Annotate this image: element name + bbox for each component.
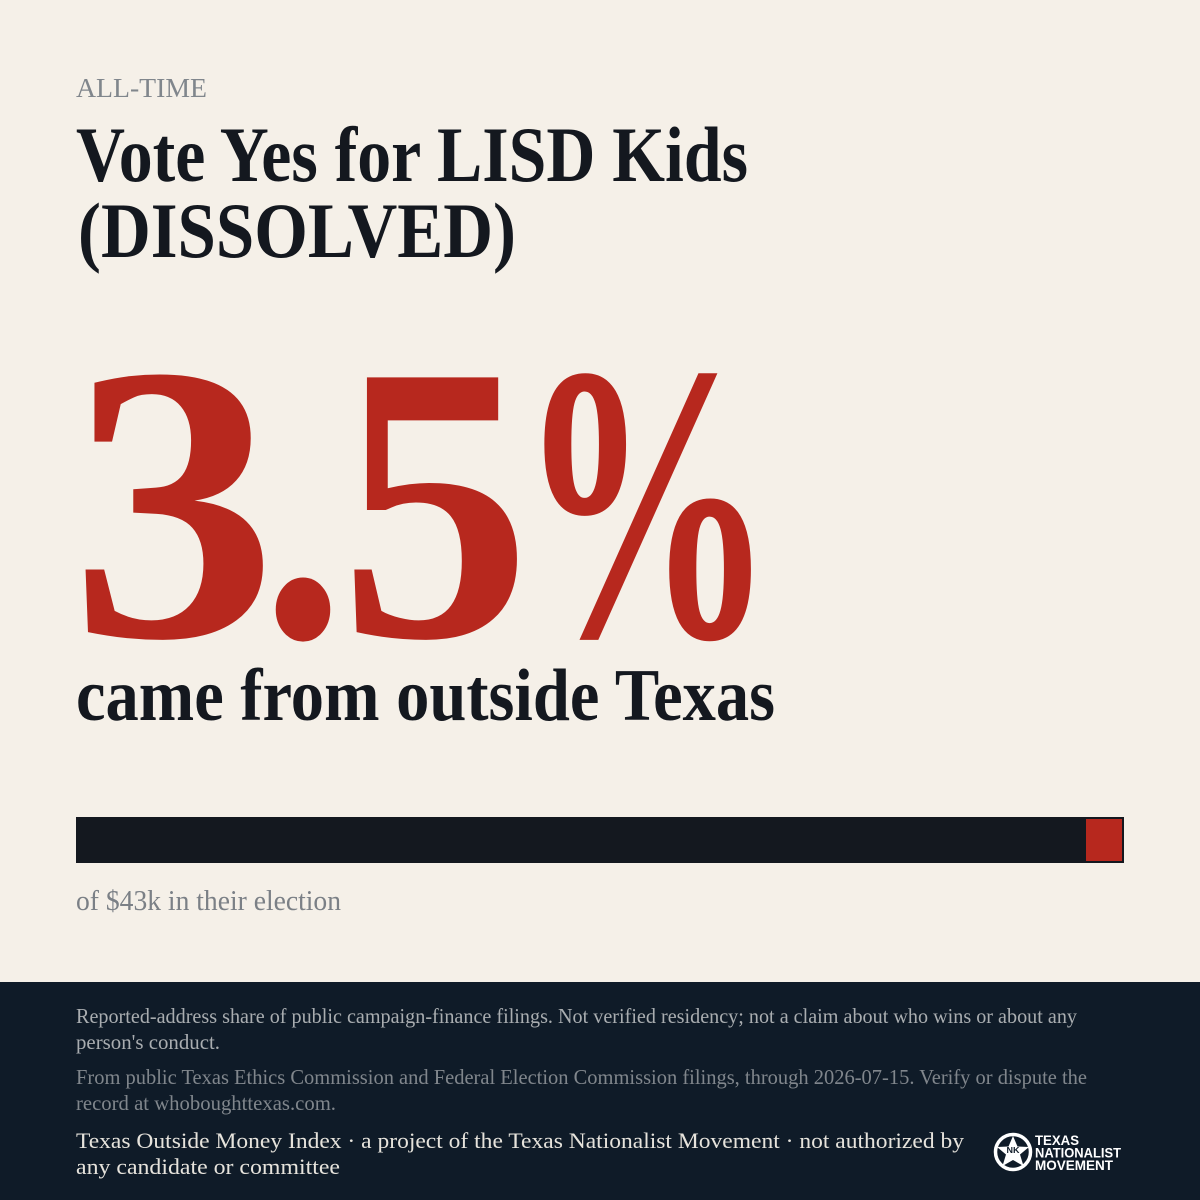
disclaimer text: Reported-address share of public campaign-finance filings. Not verified residency; not a claim about who wins or about any (76, 1004, 1077, 1028)
attribution text: Texas Outside Money Index · a project of the Texas Nationalist Movement · not authorized by (76, 1128, 965, 1153)
eyebrow: time range: ALL-TIME (76, 73, 207, 103)
statistic caption: came from outside Texas (76, 655, 775, 737)
big percentage statistic: % (518, 285, 775, 722)
disclaimer text: person's conduct. (76, 1030, 220, 1054)
source text (76, 1065, 1087, 1115)
bar track: in-state share (76, 817, 1124, 863)
title: (DISSOLVED) (78, 187, 516, 274)
source text: record at whoboughttexas.com. (76, 1091, 336, 1115)
bar caption: of $43k in their election (76, 886, 341, 917)
icon: star in ring: NK (1006, 1146, 1020, 1155)
big percentage statistic: . (261, 285, 345, 722)
big percentage statistic (70, 285, 775, 722)
share bar (76, 817, 1124, 863)
footer panel (0, 982, 1200, 1200)
attribution text (76, 1128, 965, 1179)
logo wordmark (1035, 1133, 1122, 1173)
logo wordmark: MOVEMENT (1035, 1158, 1114, 1173)
attribution text: any candidate or committee (76, 1154, 340, 1179)
title (76, 111, 748, 274)
disclaimer text (76, 1004, 1077, 1054)
title: Vote Yes for LISD Kids (76, 111, 748, 198)
logo wordmark: TEXAS (1035, 1133, 1079, 1148)
big percentage statistic: 5 (339, 285, 531, 722)
bar segment: outside Texas share (1086, 819, 1122, 861)
logo: Texas Nationalist Movement (996, 1133, 1122, 1173)
logo wordmark: NATIONALIST (1035, 1146, 1122, 1160)
big percentage statistic: 3 (70, 285, 277, 722)
source text: From public Texas Ethics Commission and Federal Election Commission filings, through 2026-07-15. Verify or dispute the (76, 1065, 1087, 1089)
